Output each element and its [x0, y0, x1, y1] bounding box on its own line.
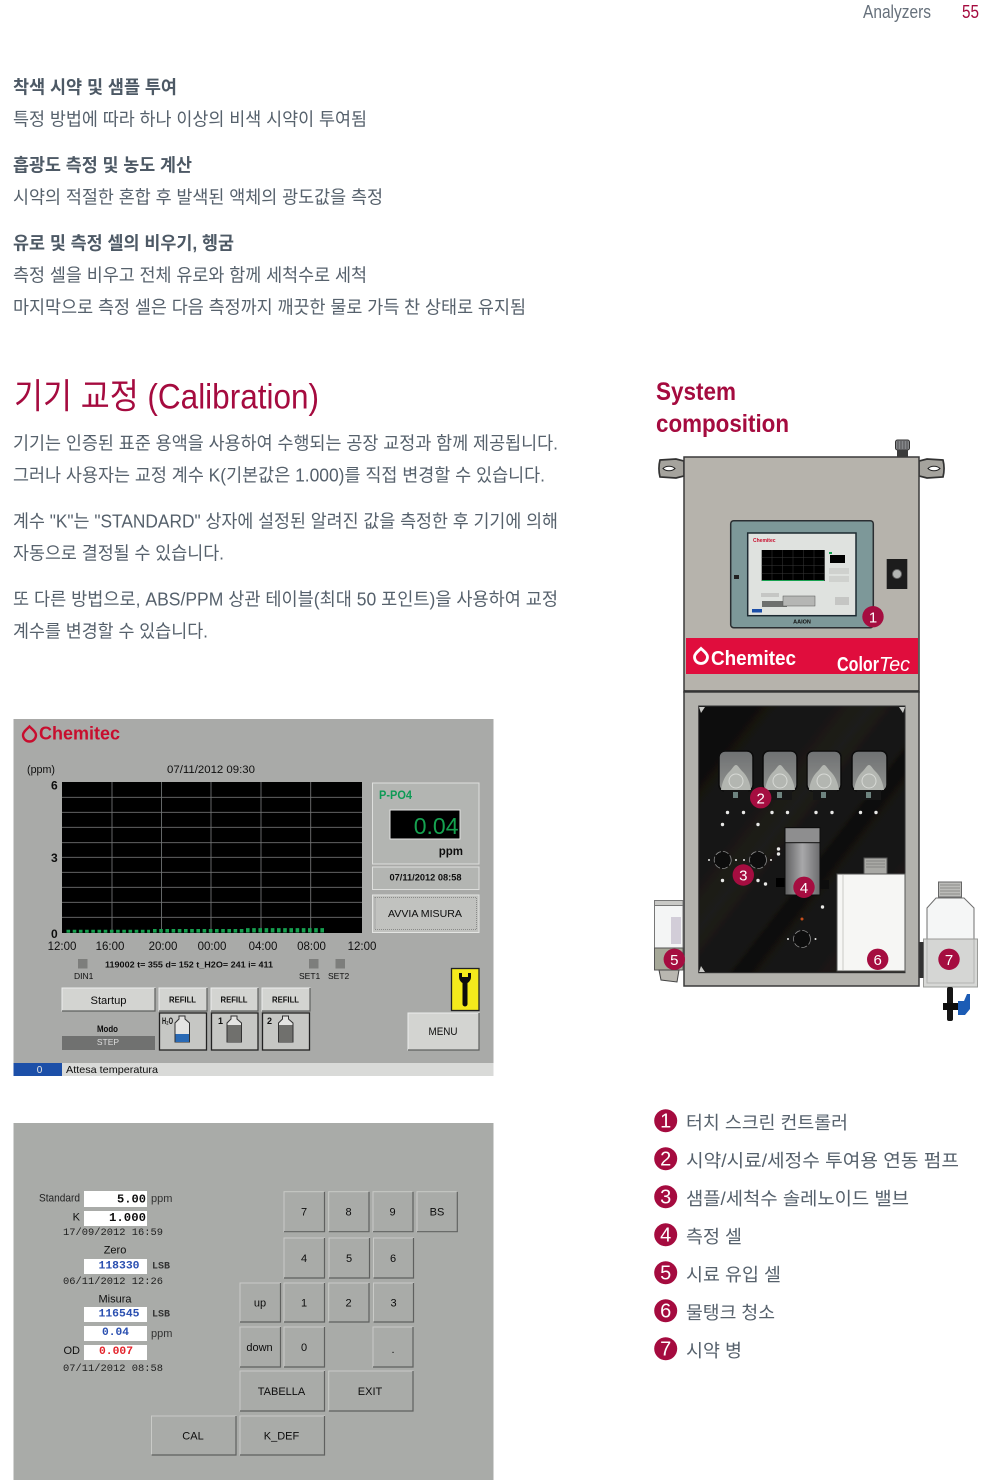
heading: absorbance measurement: 흡광도 측정 및 농도 계산	[13, 156, 192, 176]
heading: system composition: composition	[656, 410, 789, 438]
numeric keypad: 2	[345, 1298, 352, 1310]
text block: calibration description: 계수를 변경할 수 있습니다.	[13, 622, 208, 642]
calibration values: Zero	[104, 1244, 126, 1256]
legend item 5	[654, 1261, 781, 1285]
text block: process steps	[13, 78, 526, 318]
x axis time labels: 12:00	[348, 941, 376, 953]
text block: calibration description: 그러나 사용자는 교정 계수 K(기본값은 1.000)를 직접 변경할 수 있습니다.	[13, 466, 545, 486]
chart labels: (ppm)	[27, 764, 55, 776]
text block: calibration description: 자동으로 결정될 수 있습니다.	[13, 544, 224, 564]
legend item 7: 7	[660, 1339, 671, 1361]
status indicators: SET1	[299, 971, 321, 981]
calibration values: OD	[64, 1345, 80, 1357]
refill buttons: REFILL	[272, 994, 299, 1004]
reagent level icons: 2	[267, 1016, 272, 1026]
chart labels: 07/11/2012 09:30	[167, 764, 255, 776]
numeric keypad: 5	[346, 1253, 352, 1265]
numeric keypad: 1	[301, 1298, 307, 1310]
reading: last measurement time	[372, 867, 479, 890]
calibration values: 116545	[98, 1308, 140, 1320]
status indicators	[74, 959, 350, 981]
text block: calibration description	[13, 434, 558, 642]
status bar: Attesa temperatura	[66, 1064, 158, 1076]
numbered markers: 7	[945, 952, 953, 969]
mode indicator: STEP	[97, 1037, 119, 1047]
solenoid valves	[714, 852, 810, 948]
legend item 4: 측정 셀	[686, 1227, 742, 1247]
calibration values: 17/09/2012 16:59	[63, 1227, 163, 1239]
legend item 3: 3	[660, 1187, 671, 1209]
action buttons: K_DEF	[264, 1430, 300, 1442]
touch screen controller: Chemitec	[753, 538, 776, 544]
numeric keypad: 4	[301, 1253, 307, 1265]
heading: system composition	[656, 378, 789, 438]
calibration values: LSB	[152, 1262, 170, 1272]
numbered markers: 2	[757, 790, 765, 807]
numeric keypad: .	[391, 1344, 395, 1356]
chart labels: 3	[51, 851, 58, 865]
reading: last measurement time: 07/11/2012 08:58	[390, 872, 462, 884]
calibration values: Standard	[39, 1192, 80, 1204]
mounting screws	[708, 811, 878, 940]
brand band: Chemitec	[711, 648, 796, 670]
reagent level icons: H₂O	[162, 1016, 173, 1026]
legend item 2: 2	[660, 1149, 671, 1171]
calibration values: LSB	[152, 1310, 170, 1320]
peristaltic pumps	[719, 751, 887, 800]
upper housing	[684, 457, 919, 692]
body: rinsing line one: 측정 셀을 비우고 전체 유로와 함께 세척수로 세척	[13, 266, 367, 286]
legend item 4	[654, 1223, 742, 1247]
status indicators: SET2	[328, 971, 350, 981]
button: MENU: MENU	[428, 1026, 458, 1038]
button: Startup: Startup	[90, 995, 126, 1007]
legend item 1: 1	[660, 1111, 671, 1133]
legend item 7: 시약 병	[686, 1341, 742, 1361]
numbered markers	[664, 606, 960, 970]
numeric keypad: up	[254, 1298, 266, 1310]
reagent level icons	[160, 1013, 310, 1050]
page header: 55	[962, 2, 979, 22]
water tank	[837, 858, 905, 971]
heading: system composition: System	[656, 378, 736, 406]
numeric keypad: down	[246, 1342, 273, 1354]
panel: calibration screen	[14, 1123, 494, 1480]
calibration values: 0.007	[99, 1346, 133, 1358]
action buttons	[152, 1371, 413, 1455]
page header: Analyzers	[863, 2, 931, 22]
key switch	[887, 559, 907, 589]
calibration values: 5.00	[117, 1192, 146, 1206]
heading: emptying and rinsing: 유로 및 측정 셀의 비우기, 헹굼	[13, 234, 234, 254]
lower housing	[684, 692, 919, 986]
calibration values: Misura	[98, 1294, 132, 1306]
x axis time labels: 08:00	[297, 941, 326, 953]
numbered markers: 1	[869, 609, 877, 626]
numeric keypad: 7	[301, 1206, 307, 1218]
refill buttons: REFILL	[169, 994, 196, 1004]
mounting brackets	[659, 459, 944, 478]
legend item 1: 터치 스크린 컨트롤러	[686, 1113, 848, 1133]
mode indicator	[62, 1024, 155, 1050]
calibration values: K	[73, 1212, 81, 1224]
refill buttons: REFILL	[220, 994, 248, 1004]
legend item 7	[654, 1337, 742, 1361]
legend item 1	[654, 1109, 848, 1133]
status bar: 0	[37, 1065, 43, 1076]
x axis time labels	[48, 941, 376, 953]
numeric keypad: 8	[345, 1206, 352, 1218]
page header	[863, 2, 979, 22]
button: MENU	[408, 1013, 479, 1050]
reading: P-PO4 value: 0.04	[414, 813, 459, 839]
numeric keypad	[240, 1192, 457, 1367]
x axis time labels: 12:00	[48, 941, 76, 953]
refill buttons	[159, 988, 310, 1011]
reagent bottle	[920, 882, 978, 1021]
body: absorbance measurement: 시약의 적절한 혼합 후 발색된 액체의 광도값을 측정	[13, 188, 383, 208]
touch screen controller	[731, 521, 873, 628]
legend item 5: 5	[660, 1263, 671, 1285]
chart labels: 0	[51, 927, 58, 941]
logo: Chemitec: Chemitec	[39, 724, 120, 744]
status bar	[14, 1063, 494, 1076]
legend item 2: 시약/시료/세정수 투여용 연동 펌프	[686, 1151, 959, 1171]
numbered markers: 5	[670, 952, 678, 969]
title: calibration: 기기 교정 (Calibration)	[14, 377, 319, 416]
sample inlet cell	[654, 900, 683, 982]
numbered markers: 3	[739, 868, 747, 885]
button: Startup	[62, 988, 155, 1011]
body: reagent dosing: 특정 방법에 따라 하나 이상의 비색 시약이 투여됨	[13, 110, 367, 130]
x axis time labels: 20:00	[149, 941, 177, 953]
calibration values: ppm	[151, 1193, 172, 1205]
x axis time labels: 04:00	[249, 941, 277, 953]
numeric keypad: 6	[390, 1253, 396, 1265]
touch screen controller: AAION	[793, 620, 811, 626]
legend item 6	[654, 1299, 775, 1323]
numbered markers: 6	[874, 952, 882, 969]
reading: P-PO4 value: P-PO4	[379, 788, 412, 802]
legend item 5: 시료 유입 셀	[686, 1265, 781, 1285]
legend item 6: 6	[660, 1301, 671, 1323]
numeric keypad: 3	[390, 1298, 397, 1310]
brand band	[686, 638, 918, 676]
x axis time labels: 00:00	[198, 941, 226, 953]
body: rinsing line two: 마지막으로 측정 셀은 다음 측정까지 깨끗한 물로 가득 찬 상태로 유지됨	[13, 298, 526, 318]
legend item 4: 4	[660, 1225, 671, 1247]
cable gland	[896, 440, 910, 457]
x axis time labels: 16:00	[96, 941, 124, 953]
text block: calibration description: 계수 "K"는 "STANDARD" 상자에 설정된 알려진 값을 측정한 후 기기에 의해	[13, 512, 558, 532]
calibration values: 07/11/2012 08:58	[63, 1363, 163, 1375]
calibration values: 118330	[98, 1260, 140, 1272]
measuring cell	[776, 828, 829, 920]
reading: P-PO4 value	[372, 783, 479, 864]
brand band: Tec	[879, 654, 910, 676]
line chart: black plot	[62, 782, 362, 933]
calibration values: 1.000	[109, 1211, 146, 1225]
reagent level icons: 1	[218, 1016, 223, 1026]
calibration values: 06/11/2012 12:26	[63, 1276, 163, 1288]
legend item 3: 샘플/세척수 솔레노이드 밸브	[686, 1189, 909, 1209]
numeric keypad: BS	[430, 1206, 444, 1218]
button: AVVIA MISURA	[372, 895, 479, 932]
heading: reagent and sample dosing: 착색 시약 및 샘플 투여	[13, 78, 177, 98]
panel: main measurement screen	[14, 719, 494, 1076]
action buttons: CAL	[182, 1430, 204, 1442]
calibration values: 0.04	[102, 1327, 129, 1339]
icon: wrench button	[452, 968, 479, 1010]
legend: component list	[654, 1109, 959, 1361]
chart labels: 6	[51, 778, 58, 792]
button: AVVIA MISURA: AVVIA MISURA	[388, 908, 462, 920]
numeric keypad: 0	[301, 1342, 307, 1354]
text block: calibration description: 또 다른 방법으로, ABS/PPM 상관 테이블(최대 50 포인트)을 사용하여 교정	[13, 590, 558, 610]
calibration values: ppm	[151, 1328, 172, 1340]
numeric keypad: 9	[389, 1206, 396, 1218]
status indicators: DIN1	[74, 971, 94, 981]
diagram: analyzer cabinet	[654, 440, 978, 1021]
text block: calibration description: 기기는 인증된 표준 용액을 사용하여 수행되는 공장 교정과 함께 제공됩니다.	[13, 434, 558, 454]
legend item 6: 물탱크 청소	[686, 1303, 775, 1323]
calibration values	[39, 1191, 172, 1375]
status indicators: 119002 t= 355 d= 152 t_H2O= 241 i= 411	[105, 960, 273, 970]
chart labels	[27, 764, 255, 941]
reading: P-PO4 value: ppm	[439, 846, 463, 858]
action buttons: EXIT	[358, 1386, 383, 1398]
mode indicator: Modo	[97, 1024, 118, 1034]
numbered markers: 4	[800, 880, 808, 897]
brand band: Color	[837, 654, 879, 676]
action buttons: TABELLA	[258, 1386, 306, 1398]
